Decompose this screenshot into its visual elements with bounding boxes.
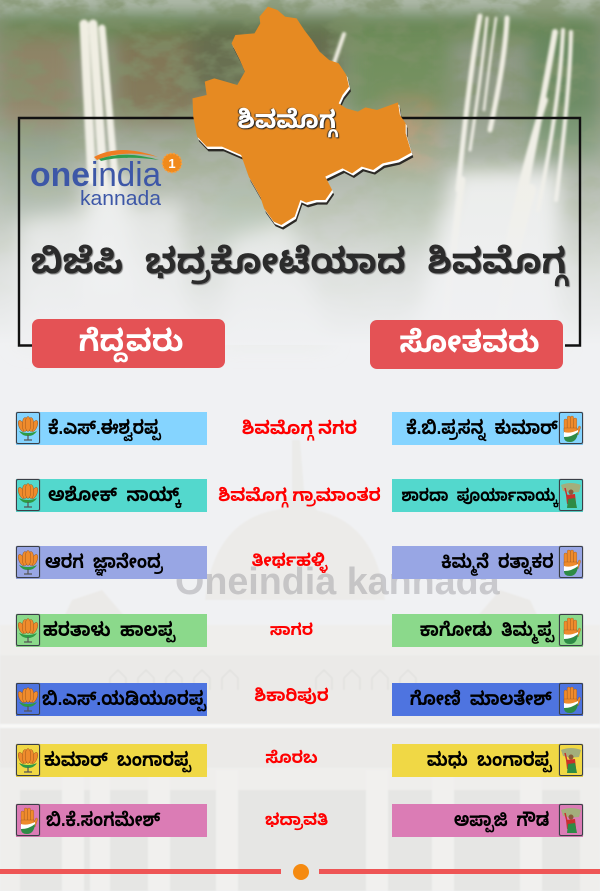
row 6 runner-up [392, 744, 583, 777]
row 5 runner-up: ಗೋಣಿ ಮಾಲತೇಶ್ [410, 689, 552, 710]
logo: oneindia kannada: 1 [168, 156, 176, 171]
row 5 winner [16, 683, 207, 716]
building faint [0, 440, 600, 891]
footer divider with dot [0, 864, 600, 880]
logo: oneindia kannada [30, 150, 182, 210]
row 5 winner: ಬಿ.ಎಸ್.ಯಡಿಯೂರಪ್ಪ [42, 689, 206, 710]
row 4 winner: ಹರತಾಳು ಹಾಲಪ್ಪ [43, 620, 175, 641]
row 3 constituency: ತೀರ್ಥಹಳ್ಳಿ [252, 550, 327, 570]
logo: oneindia kannada: kannada [80, 188, 162, 210]
heading: winners [32, 319, 225, 368]
logo: oneindia kannada: india [91, 156, 161, 194]
row 6 winner [16, 744, 207, 777]
row 7 runner-up [392, 804, 583, 837]
row 6 winner: ಕುಮಾರ್ ಬಂಗಾರಪ್ಪ [44, 750, 191, 771]
main title: ಬಿಜೆಪಿ ಭದ್ರಕೋಟೆಯಾದ ಶಿವಮೊಗ್ಗ [30, 242, 567, 281]
falls [84, 16, 571, 330]
logo: oneindia kannada: one [30, 156, 90, 194]
row 2 winner: ಅಶೋಕ್ ನಾಯ್ಕ್ [48, 485, 181, 506]
row 7 runner-up: ಅಪ್ಪಾಜಿ ಗೌಡ [454, 810, 549, 831]
row 1 runner-up: ಕೆ.ಬಿ.ಪ್ರಸನ್ನ ಕುಮಾರ್ [406, 418, 558, 439]
row 7 winner [16, 804, 207, 837]
row 1 winner [16, 412, 207, 445]
row 3 runner-up [392, 546, 583, 579]
watermark: Oneindia kannada [175, 560, 500, 602]
row 4 constituency: ಸಾಗರ [270, 621, 313, 639]
title frame [18, 116, 582, 347]
row 1 constituency: ಶಿವಮೊಗ್ಗ ನಗರ [242, 418, 357, 438]
heading: winners: ಗೆದ್ದವರು [79, 325, 183, 358]
row 3 winner [16, 546, 207, 579]
row 2 constituency: ಶಿವಮೊಗ್ಗ ಗ್ರಾಮಾಂತರ [218, 485, 381, 505]
row 1 runner-up [392, 412, 583, 445]
map label: ಶಿವಮೊಗ್ಗ [238, 106, 336, 134]
row 6 constituency: ಸೊರಬ [265, 749, 318, 767]
row 4 winner [16, 614, 207, 647]
row 3 winner: ಆರಗ ಜ್ಞಾನೇಂದ್ರ [45, 552, 163, 573]
row 5 runner-up [392, 683, 583, 716]
row 2 runner-up [392, 479, 583, 512]
row 7 constituency: ಭದ್ರಾವತಿ [265, 811, 328, 829]
district map of Shivamogga [192, 6, 414, 230]
row 2 runner-up: ಶಾರದಾ ಪೂರ್ಯಾನಾಯ್ಕ [402, 486, 558, 505]
row 7 winner: ಬಿ.ಕೆ.ಸಂಗಮೇಶ್ [46, 810, 160, 831]
row 2 winner [16, 479, 207, 512]
row 4 runner-up [392, 614, 583, 647]
heading: losers: ಸೋತವರು [399, 326, 540, 359]
row 5 constituency: ಶಿಕಾರಿಪುರ [254, 686, 329, 705]
heading: losers [370, 320, 563, 369]
row 3 runner-up: ಕಿಮ್ಮನೆ ರತ್ನಾಕರ [441, 552, 554, 573]
row 4 runner-up: ಕಾಗೋಡು ತಿಮ್ಮಪ್ಪ [420, 620, 554, 641]
row 1 winner: ಕೆ.ಎಸ್.ಈಶ್ವರಪ್ಪ [48, 418, 161, 439]
row 6 runner-up: ಮಧು ಬಂಗಾರಪ್ಪ [427, 750, 552, 771]
